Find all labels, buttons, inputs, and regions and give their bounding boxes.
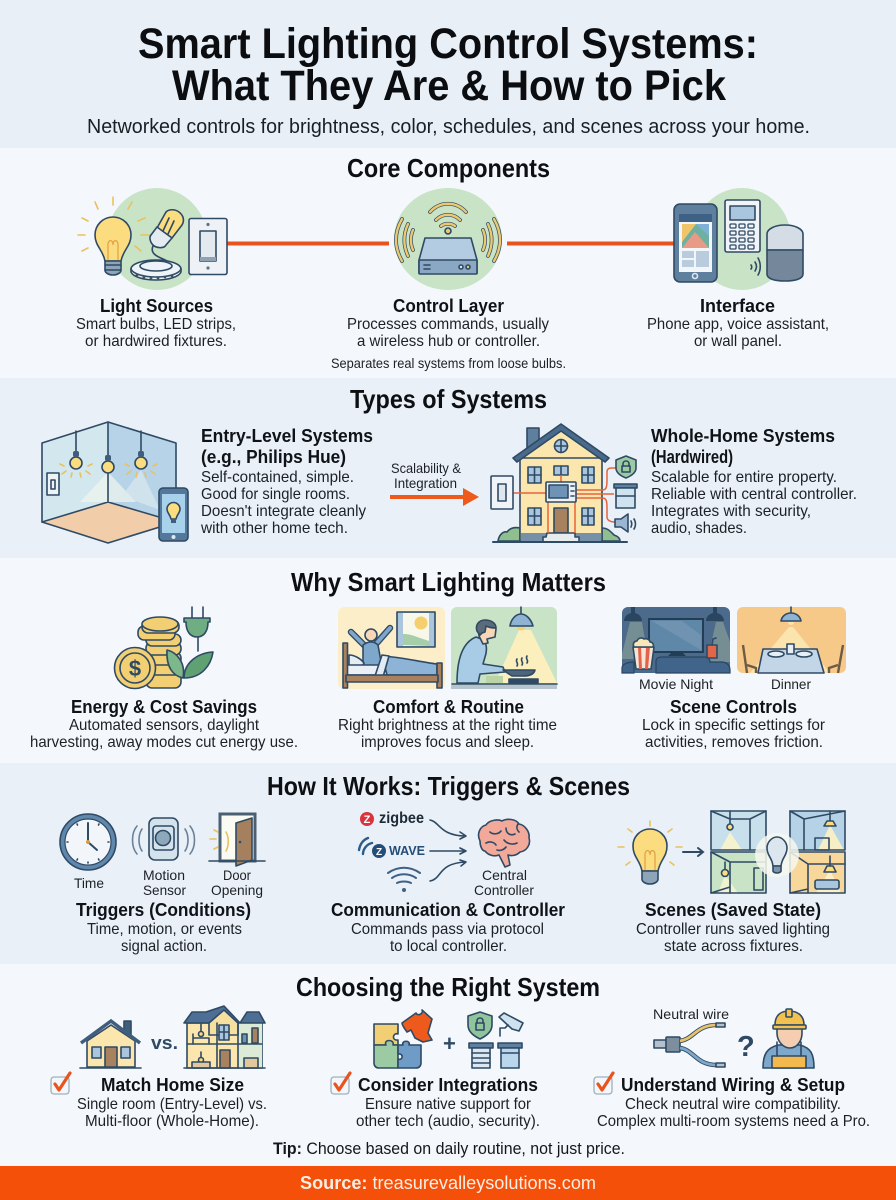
item: consider integrations: Ensure native support for — [365, 1096, 532, 1113]
icon: light sources — [78, 188, 227, 290]
item: understand wiring: Understand Wiring & Setup — [621, 1074, 845, 1095]
panel: core components — [76, 153, 829, 371]
item: understand wiring: Complex multi-room systems need a Pro. — [597, 1113, 870, 1130]
item: communication text: to local controller. — [390, 938, 507, 955]
heading: core components: Core Components — [347, 153, 550, 183]
item: consider integrations: Consider Integrations — [358, 1074, 538, 1095]
item: entry-level text: Self-contained, simple. — [201, 469, 354, 486]
item: control layer text: Processes commands, usually — [347, 316, 549, 333]
scene labels: Movie Night — [639, 676, 713, 692]
item: entry-level text: Entry-Level Systems — [201, 425, 373, 446]
item: consider integrations — [331, 1073, 540, 1130]
trigger labels: Door — [223, 867, 251, 883]
item: interface text: or wall panel. — [694, 333, 782, 350]
icon: protocol logos — [359, 810, 425, 892]
item: understand wiring: Check neutral wire compatibility. — [625, 1096, 841, 1113]
central controller label: Controller — [474, 882, 534, 898]
arrow: scalability and integration — [390, 460, 479, 506]
panel: choosing the right system — [51, 972, 870, 1158]
item: whole-home text: Whole-Home Systems — [651, 425, 835, 446]
panel: types of systems — [42, 384, 857, 543]
item: comfort text — [338, 696, 557, 751]
item: interface text: Phone app, voice assistant, — [647, 316, 829, 333]
arrows: protocol to controller — [430, 820, 466, 881]
item: scenes text — [636, 899, 830, 955]
item: scenes text: Controller runs saved lighting — [636, 921, 830, 938]
icon: brain — [479, 819, 530, 867]
item: light sources text: or hardwired fixtures. — [85, 333, 227, 350]
checkbox — [594, 1073, 613, 1094]
icon: puzzle pieces — [374, 1010, 432, 1068]
icon: protocol logos: WAVE — [389, 843, 425, 858]
arrow: scalability and integration: Integration — [394, 475, 457, 491]
footer bar — [0, 1166, 896, 1200]
panel: why smart lighting matters — [30, 567, 846, 751]
trigger labels: Opening — [211, 882, 263, 898]
heading: types of systems: Types of Systems — [350, 384, 547, 414]
title: Smart Lighting Control Systems: — [138, 20, 758, 68]
header — [87, 20, 810, 138]
item: triggers text: Triggers (Conditions) — [76, 899, 251, 920]
icon: multi-floor house — [184, 1006, 265, 1068]
heading: how it works: How It Works: Triggers & Scenes — [267, 771, 630, 801]
icon: whole home house — [491, 424, 637, 542]
icon: room with pendant lights — [42, 422, 188, 543]
icon: protocol logos: Z — [364, 814, 371, 826]
icon: wires — [654, 1023, 725, 1067]
item: entry-level text: with other home tech. — [200, 520, 348, 537]
item: scenes text: state across fixtures. — [664, 938, 803, 955]
item: comfort text: improves focus and sleep. — [361, 734, 534, 751]
vs label: vs. — [151, 1033, 178, 1053]
item: communication text: Communication & Controller — [331, 899, 565, 920]
icon: movie night scene — [622, 607, 730, 673]
item: whole-home text: Scalable for entire property. — [651, 469, 837, 486]
icon: electrician — [763, 1009, 814, 1068]
item: scene controls text: activities, removes friction. — [645, 734, 823, 751]
item: light sources text — [76, 295, 236, 350]
item: whole-home text — [651, 425, 857, 537]
item: energy text: harvesting, away modes cut energy use. — [30, 734, 298, 751]
icon: door opening — [209, 814, 265, 866]
footer bar: Source: treasurevalleysolutions.com — [300, 1173, 596, 1193]
item: whole-home text: Integrates with security, — [651, 503, 811, 520]
item: light sources text: Light Sources — [100, 295, 213, 316]
arrow: scalability and integration: Scalability & — [391, 460, 462, 476]
icon: morning bedroom scene — [338, 607, 445, 689]
trigger labels — [74, 867, 263, 898]
connector lines — [226, 242, 674, 246]
title: What They Are & How to Pick — [172, 62, 726, 110]
item: energy text: Energy & Cost Savings — [71, 696, 257, 717]
item: interface text — [647, 295, 829, 350]
item: entry-level text — [200, 425, 373, 537]
icon: interface devices — [674, 188, 803, 290]
trigger labels: Motion — [143, 867, 185, 883]
panel: how it works — [60, 771, 845, 955]
item: control layer text: Control Layer — [393, 295, 504, 316]
icon: security and shades — [468, 1012, 523, 1068]
central controller label — [474, 867, 534, 898]
icon: clock — [60, 814, 116, 870]
icon: coins and plug — [114, 607, 213, 688]
item: match home size: Single room (Entry-Level) vs. — [77, 1096, 267, 1113]
neutral wire label: Neutral wire — [653, 1006, 729, 1022]
trigger labels: Sensor — [143, 882, 186, 898]
icon: protocol logos: Z — [376, 847, 382, 858]
item: comfort text: Comfort & Routine — [373, 696, 524, 717]
item: whole-home text: (Hardwired) — [651, 446, 733, 467]
item: comfort text: Right brightness at the right time — [338, 717, 557, 734]
heading: choosing the right system: Choosing the Right System — [296, 972, 600, 1002]
icon: protocol logos: zigbee — [379, 810, 424, 827]
icon: control layer hub — [394, 188, 502, 290]
item: communication text: Commands pass via protocol — [351, 921, 544, 938]
icon: small house — [80, 1021, 141, 1068]
item: energy text: Automated sensors, daylight — [69, 717, 260, 734]
plus sign: + — [443, 1031, 456, 1056]
item: understand wiring — [594, 1073, 870, 1130]
checkbox — [51, 1073, 70, 1094]
title — [138, 20, 758, 110]
trigger labels: Time — [74, 875, 104, 891]
item: whole-home text: Reliable with central controller. — [651, 486, 857, 503]
item: light sources text: Smart bulbs, LED strips, — [76, 316, 236, 333]
tip: Tip: Choose based on daily routine, not just price. — [273, 1140, 625, 1158]
icon: kitchen cooking scene — [451, 607, 557, 689]
heading: why smart lighting matters: Why Smart Lighting Matters — [291, 567, 606, 597]
central controller label: Central — [482, 867, 527, 883]
question mark: ? — [737, 1031, 755, 1063]
item: entry-level text: Doesn't integrate cleanly — [201, 503, 366, 520]
item: scene controls text — [642, 696, 826, 751]
item: communication text — [331, 899, 565, 955]
scene labels: Dinner — [771, 676, 811, 692]
icon: bulb to scene rooms — [618, 811, 845, 893]
item: scene controls text: Lock in specific settings for — [642, 717, 826, 734]
item: consider integrations: other tech (audio, security). — [356, 1113, 540, 1130]
item: match home size: Multi-floor (Whole-Home). — [85, 1113, 259, 1130]
icon: dinner scene — [737, 607, 846, 673]
item: control layer text: a wireless hub or controller. — [357, 333, 540, 350]
item: triggers text — [76, 899, 251, 955]
icon: coins and plug: $ — [129, 656, 141, 681]
scene labels — [639, 676, 811, 692]
item: control layer text — [331, 295, 566, 371]
item: interface text: Interface — [700, 295, 775, 316]
item: triggers text: signal action. — [121, 938, 207, 955]
item: match home size — [51, 1073, 267, 1130]
subtitle: Networked controls for brightness, color, schedules, and scenes across your home. — [87, 116, 810, 138]
item: entry-level text: (e.g., Philips Hue) — [201, 446, 346, 467]
item: whole-home text: audio, shades. — [651, 520, 747, 537]
item: control layer text: Separates real systems from loose bulbs. — [331, 355, 566, 371]
item: scene controls text: Scene Controls — [670, 696, 797, 717]
item: energy text — [30, 696, 298, 751]
item: scenes text: Scenes (Saved State) — [645, 899, 821, 920]
item: match home size: Match Home Size — [101, 1074, 244, 1095]
icon: motion sensor — [132, 818, 194, 860]
item: entry-level text: Good for single rooms. — [201, 486, 350, 503]
checkbox — [331, 1073, 350, 1094]
item: triggers text: Time, motion, or events — [87, 921, 242, 938]
